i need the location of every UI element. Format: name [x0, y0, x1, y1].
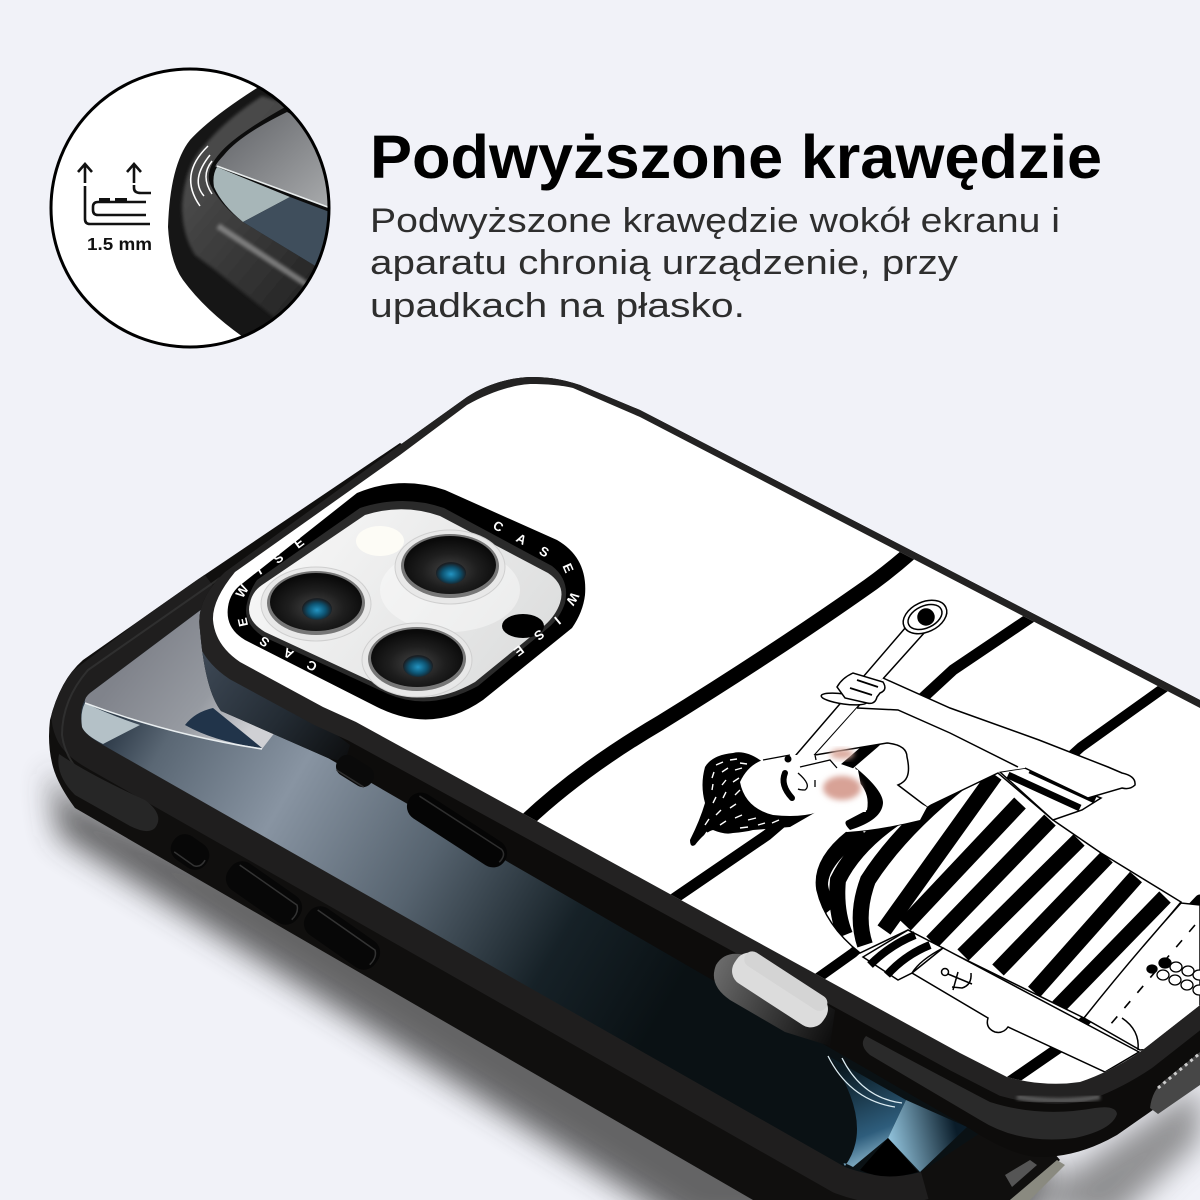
- back phone side buttons: [166, 829, 386, 975]
- camera ring: [228, 483, 585, 719]
- blush: [823, 776, 861, 800]
- CASEWISE ring text: CASEWISE: [494, 522, 580, 656]
- camera ring inner rim: [246, 501, 566, 701]
- back phone: [49, 443, 1065, 1200]
- lens: top right: [395, 530, 505, 604]
- lower blue wallpaper streaks: [828, 1056, 967, 1177]
- neck and beard: [846, 804, 927, 832]
- back corner carbon patch: [58, 754, 158, 831]
- bumper rim: [213, 384, 1200, 1084]
- hand: [837, 673, 885, 703]
- screen dark blob: [185, 708, 262, 748]
- description text: aparatu chronią urządzenie, przy: [370, 244, 958, 282]
- back phone screen: [81, 540, 1000, 1176]
- back phone side detail: [1010, 1160, 1065, 1200]
- description text: [370, 202, 1060, 325]
- shorts and rope: [1084, 903, 1200, 1050]
- front phone shell: [199, 377, 1200, 1157]
- grip ring: [820, 692, 867, 706]
- lower arm: [912, 948, 1139, 1072]
- back bumper highlight line: [62, 578, 220, 785]
- right corner speaker detail: [1150, 1052, 1200, 1114]
- button: volume down: [298, 901, 386, 975]
- title: Podwyższone krawędzie: [370, 123, 1102, 191]
- side button: power: [402, 787, 512, 873]
- lens: left: [261, 567, 371, 641]
- close-up of phone corner: [168, 88, 328, 336]
- anchor tattoo: [942, 968, 972, 990]
- raised arm and shoulder: [816, 678, 1096, 806]
- illustration: sailor with spyglass: [690, 594, 1200, 1072]
- lens: bottom: [362, 623, 472, 697]
- translucent side by camera: [200, 630, 350, 762]
- phone shadow: [50, 770, 1200, 1200]
- upper cuff: [1000, 768, 1101, 820]
- background stripes: [525, 553, 1200, 1085]
- front corner carbon patch: [863, 1036, 1117, 1140]
- torso stripes: [817, 775, 1171, 1017]
- white screen back with illustration: [190, 370, 1200, 1100]
- button: action: [166, 829, 214, 875]
- camera module: [228, 483, 586, 720]
- front phone: [199, 377, 1200, 1156]
- icon: raised lip diagram: [78, 164, 151, 224]
- CASEWISE ring text: [235, 522, 580, 670]
- impact arcs: [191, 146, 212, 206]
- detail circle: raised edge close-up: [51, 60, 340, 360]
- charging port: [714, 947, 835, 1046]
- button: volume up: [220, 856, 308, 930]
- face: [740, 755, 866, 816]
- screen upper wedge: [85, 560, 300, 749]
- lower cuff: [863, 930, 943, 980]
- back bumper upper rim: [79, 595, 921, 1176]
- spyglass: [796, 594, 952, 761]
- screen light triangle: [81, 703, 140, 744]
- label: 1.5 mm: 1.5 mm: [87, 234, 152, 254]
- description text: Podwyższone krawędzie wokół ekranu i: [370, 202, 1060, 240]
- flash: [356, 526, 404, 556]
- description text: upadkach na płasko.: [370, 287, 745, 325]
- CASEWISE ring text: CASEWISE: [235, 538, 316, 670]
- screen swoosh line: [85, 703, 262, 749]
- eyebrow and eye: [784, 773, 792, 798]
- hair: [690, 752, 823, 846]
- back phone bumper: [49, 443, 1060, 1200]
- microphone hole: [502, 614, 544, 638]
- bumper corner highlight: [1017, 1097, 1100, 1100]
- side button: microphone slot: [332, 751, 378, 791]
- camera glass: [249, 509, 562, 697]
